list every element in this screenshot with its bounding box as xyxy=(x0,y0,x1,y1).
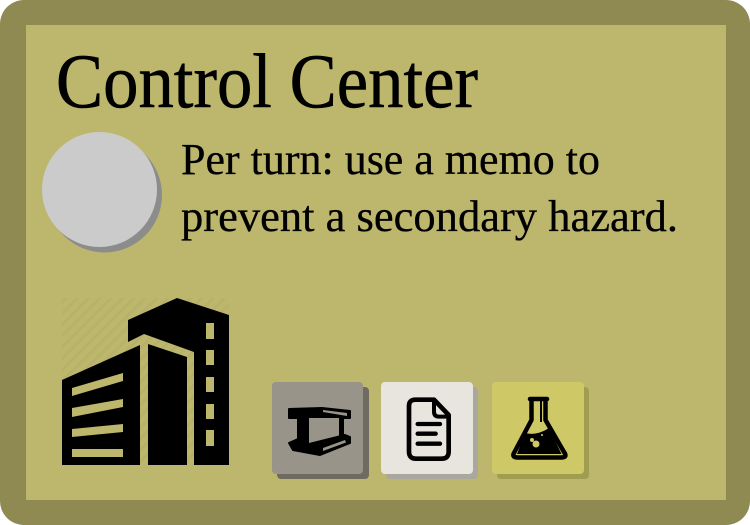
title: Control Center xyxy=(56,38,478,124)
rule text: prevent a secondary hazard. xyxy=(181,192,678,241)
icon: building xyxy=(62,298,229,465)
icon: flask xyxy=(513,399,565,458)
tile: chemistry xyxy=(492,382,589,479)
tile: memo xyxy=(381,382,478,479)
rule text xyxy=(181,135,678,241)
rule text: Per turn: use a memo to xyxy=(181,135,600,184)
icon: steel beam xyxy=(289,408,350,455)
icon: round token xyxy=(42,132,162,252)
tile: steel beam xyxy=(272,382,369,479)
icon: document xyxy=(409,400,449,459)
